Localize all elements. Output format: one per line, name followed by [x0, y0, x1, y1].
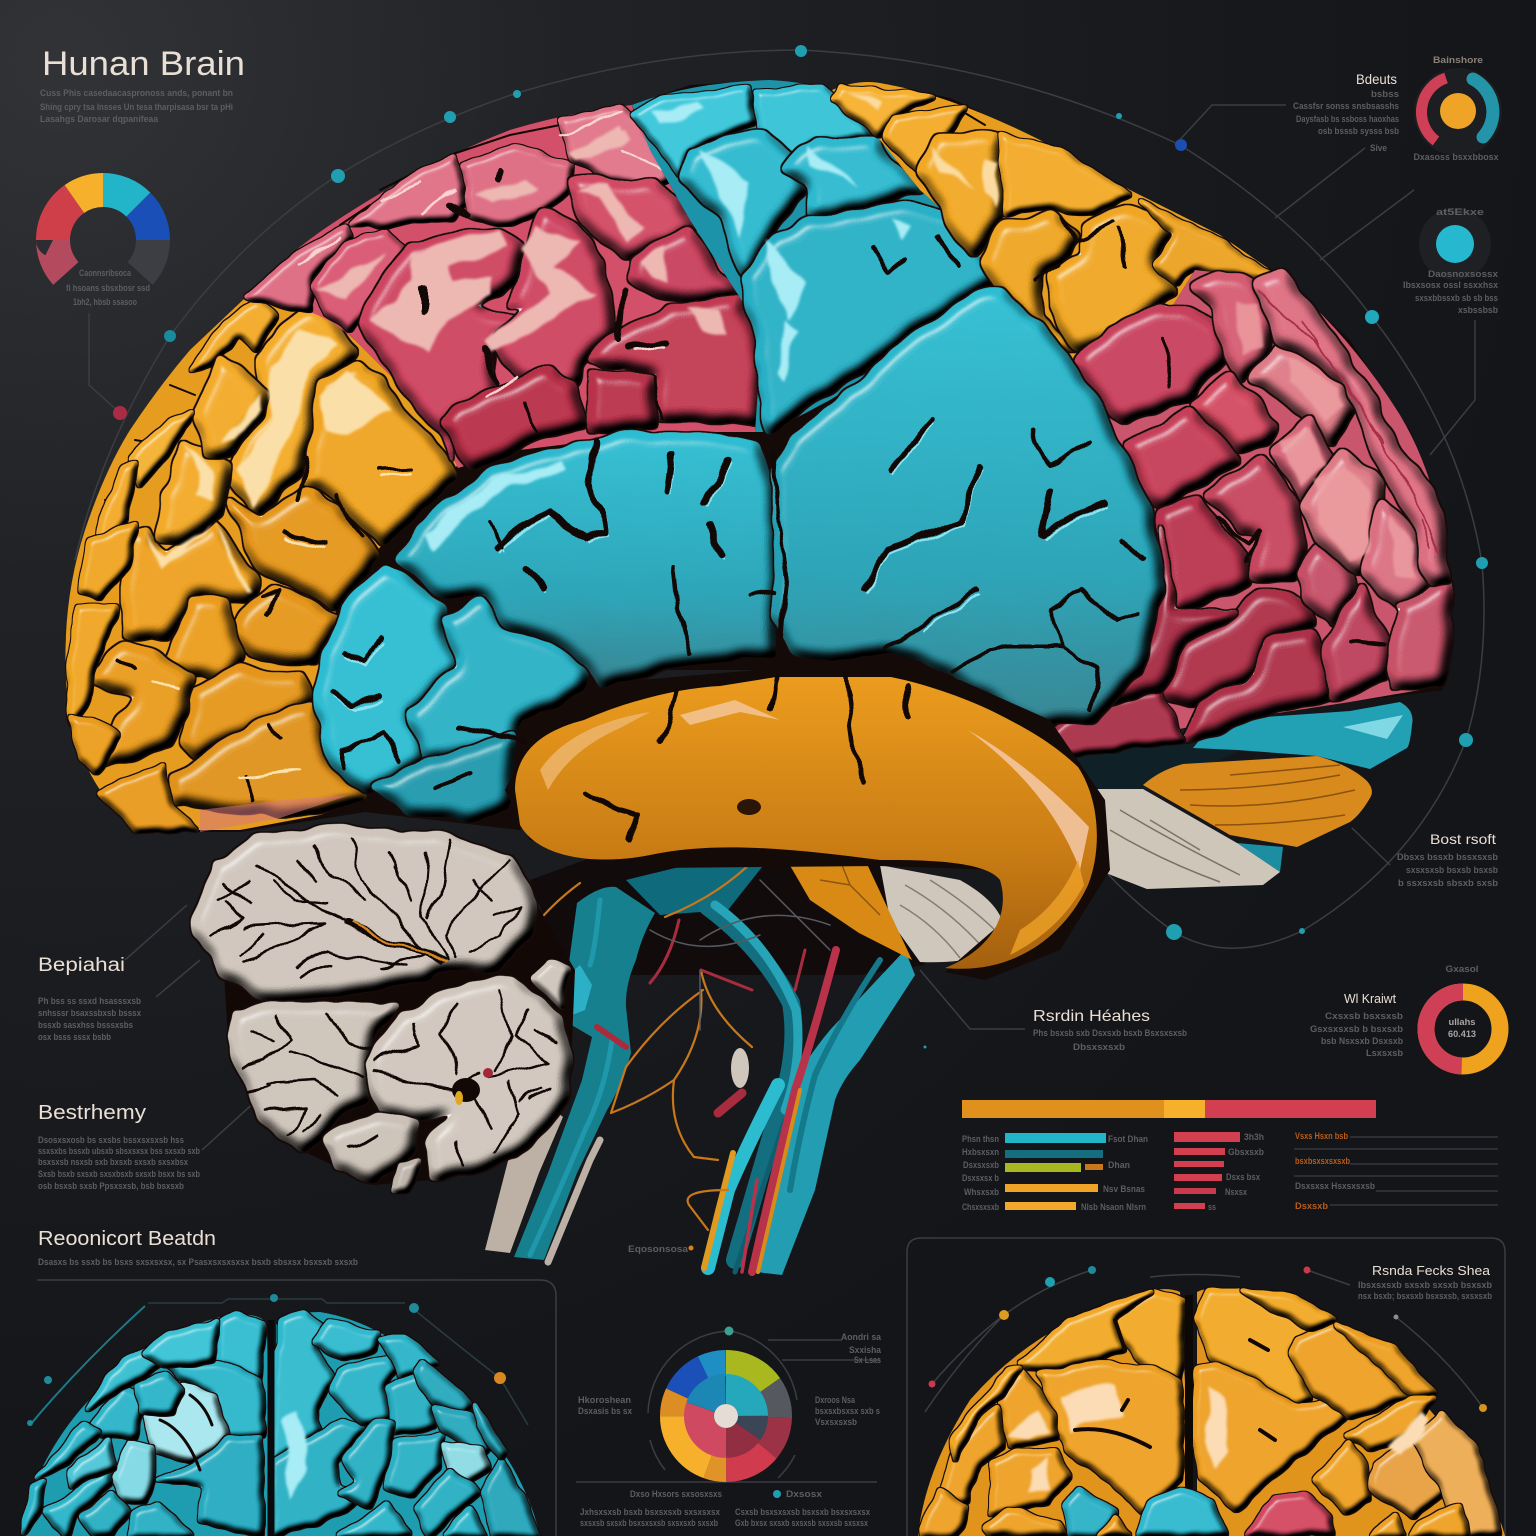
intro text: Shing cpry tsa Insses Un tesa tharpisasa bsr ta pHi [40, 102, 233, 112]
bar chart: middle: ss [1208, 1202, 1216, 1212]
grey fin [880, 865, 1005, 962]
pie chart block [576, 1326, 882, 1528]
left labels: brainstem text: Sxsb bsxb sxsxb sxsxbsxb sxsxb bsxx bs sxb [38, 1169, 200, 1179]
pie labels: Dxroos Nsa [815, 1395, 856, 1405]
brainstem and nerves [485, 840, 925, 1275]
intro text: Cuss Phis casedaacaspronoss ands, ponant bn [40, 88, 233, 98]
annotation arcs and leader lines [75, 50, 1484, 1150]
right mid label: Bost rsoft [1430, 831, 1496, 847]
list with rules: Dsxsxb [1295, 1201, 1329, 1211]
right mid label: Dbsxs bssxb bssxsxsb [1397, 852, 1499, 862]
circle stat: upper right: at5Ekxe [1436, 207, 1484, 217]
ring chart: top right [1414, 55, 1502, 162]
left labels: cerebellum text: bssxb sasxhss bsssxsbs [38, 1020, 133, 1030]
yellow brain caption [1358, 1263, 1492, 1301]
donut chart and label: Wl Kraiwt [1344, 991, 1396, 1006]
bar chart: left: Phsn thsn [962, 1134, 999, 1144]
teal brain [21, 1312, 540, 1536]
bar chart: left: Whsxsxb [964, 1187, 999, 1197]
top right labels: bsbss [1371, 89, 1399, 99]
cerebrum dark base [65, 80, 1450, 832]
list with rules: Vsxs Hsxn bsb [1295, 1131, 1348, 1141]
donut chart and label: Lsxsxsb [1366, 1048, 1404, 1058]
pie labels: Jxhsxsxsb bsxb bsxsxsxb sxsxsxsx [580, 1507, 720, 1517]
donut chart and label: Gsxsxsxsb b bsxsxb [1310, 1024, 1404, 1034]
pie labels: bsxsxbsxsx sxb s [815, 1406, 880, 1416]
right heading block: Rsrdin Héahes [1033, 1008, 1150, 1025]
bar chart: left: Dhan [1108, 1160, 1130, 1170]
pie labels: Dxso Hxsors sxsosxsxs [630, 1489, 722, 1499]
left labels: brainstem text: bsxsxsb nsxsb sxb bxsxb sxsxb sxsxbsx [38, 1157, 188, 1167]
annotation dots [113, 45, 1488, 1048]
bar chart: middle: Dsxs bsx [1226, 1172, 1260, 1182]
right mid label [1397, 831, 1499, 888]
title block [40, 45, 245, 124]
yellow brain caption: Ibsxsxsxb sxsxb sxsxb bsxsxb [1358, 1280, 1492, 1290]
gauge caption: fi hsoans sbsxbosr ssd [66, 283, 150, 293]
right heading block: Phs bsxsb sxb Dsxsxb bsxb Bsxsxsxsb [1033, 1028, 1187, 1038]
parietal lobe: pink gyri [245, 105, 761, 468]
left labels: cerebellum text: Bepiahai [38, 955, 125, 976]
panel: yellow brain bottom right [907, 1238, 1505, 1536]
pie labels [578, 1332, 882, 1528]
intro text: Lasahgs Darosar dqpanifeaa [40, 114, 159, 124]
bar chart: left: Nlsb Nsaon Nlsrn [1081, 1202, 1146, 1212]
heading: lower left: Dsasxs bs ssxb bs bsxs sxsxsxsx, sx Psasxsxsxsxsx bsxb sbsxsx bsxsxb sxsxb [38, 1257, 358, 1267]
heading: lower left: Reoonicort Beatdn [38, 1228, 216, 1250]
circle stat: upper right: Daosnoxsossx [1428, 269, 1498, 279]
frontal lobe: yellow gyri [65, 298, 458, 832]
panel: teal brain bottom left [21, 1280, 556, 1536]
donut [1426, 992, 1500, 1066]
pie chart [673, 1363, 779, 1469]
intro text [40, 88, 233, 124]
pie labels: Hkoroshean [578, 1395, 631, 1405]
occipital lobe: pink right gyri [1050, 270, 1450, 756]
pie labels: Aondri sa [841, 1332, 882, 1342]
top right labels: osb bsssb sysss bsb [1318, 126, 1399, 136]
pie labels: Csxsb bsxsxsxsb bsxsxb bsxsxsxsx [735, 1507, 870, 1517]
right mid label: sxsxsxsb bsxsb bsxsb [1406, 865, 1498, 875]
yellow brain caption: nsx bsxb; bsxsxb bsxsxsb, sxsxsxb [1358, 1291, 1492, 1301]
top right labels: Cassfsr sonss snsbsasshs [1293, 101, 1399, 111]
title: Hunan Brain [42, 45, 245, 83]
bar chart: middle: Gbsxsxb [1228, 1147, 1264, 1157]
left labels: brainstem text: ssxsxbs bssxb ubsxb sbsxsxsx bss sxsxb sxb [38, 1146, 200, 1156]
bar chart: left: Chsxsxsxb [962, 1202, 999, 1212]
circle stat: upper right [1403, 207, 1498, 315]
upper frontal lobe: yellow gyri [831, 82, 1285, 372]
top right labels [1293, 71, 1399, 153]
circle stat: upper right: sxsxbbssxb sb sb bss [1415, 293, 1498, 303]
pie labels: Sxxisha [849, 1345, 882, 1355]
yellow brain caption: Rsnda Fecks Shea [1372, 1263, 1491, 1278]
bar chart: middle: Nsxsx [1225, 1187, 1247, 1197]
gauge caption: Caonnsribsoca [79, 268, 132, 278]
left labels: cerebellum text [38, 955, 141, 1042]
bar chart: left: Dsxsxsx b [962, 1173, 999, 1183]
pie labels: Dsxasis bs sx [578, 1406, 632, 1416]
bar chart: left: Hxbsxsxn [962, 1147, 999, 1157]
left labels: brainstem text [38, 1102, 200, 1191]
top right labels: Daysfasb bs ssboss haoxhas [1296, 114, 1399, 124]
heading: lower left [38, 1228, 358, 1267]
ring chart: top right: Dxasoss bsxxbbosx [1414, 152, 1498, 162]
small stem caption: Eqosonsosa [628, 1244, 689, 1254]
orange wing [781, 847, 912, 960]
bar chart: left: Nsv Bsnas [1103, 1184, 1145, 1194]
temporal band: teal lobes [315, 290, 1160, 820]
left labels: cerebellum text: snhsssr bsaxssbxsb bsssx [38, 1008, 141, 1018]
donut chart and label: bsb Nsxsxb Dsxsxb [1321, 1036, 1403, 1046]
cerebellum [195, 828, 575, 1192]
pie labels: Vsxsxsxsb [815, 1417, 857, 1427]
temporal lobe: orange [505, 662, 1110, 980]
list with rules: bsxbsxsxsxsxb [1295, 1156, 1350, 1166]
circle stat: upper right: Ibsxsosx ossl ssxxhsx [1403, 280, 1498, 290]
circle stat: upper right: xsbssbsb [1458, 305, 1498, 315]
list with rules: Dsxsxsx Hsxsxsxsb [1295, 1181, 1375, 1191]
bar chart: left: Fsot Dhan [1108, 1134, 1148, 1144]
donut chart and label: Gxasol [1446, 964, 1478, 974]
pie labels: sxsxsb sxsxb bsxsxsxsb sxsxsxb sxsxb [580, 1518, 718, 1528]
gauge caption: 1bh2, hbsb ssasoo [73, 297, 137, 307]
left labels: brainstem text: Bestrhemy [38, 1102, 146, 1124]
donut chart and label [1310, 964, 1500, 1066]
bar chart: left: Dsxsxsxb [963, 1160, 999, 1170]
list with rules [1294, 1131, 1498, 1211]
yellow brain [918, 1288, 1505, 1536]
donut chart and label: Cxsxsb bsxsxsb [1325, 1011, 1404, 1021]
ring chart: top right: Bainshore [1433, 55, 1483, 65]
bar chart: middle: 3h3h [1244, 1132, 1264, 1142]
left labels: brainstem text: Dsosxsxosb bs sxsbs bssxsxsxsb hss [38, 1135, 184, 1145]
left labels: cerebellum text: Ph bss ss ssxd hsasssxsb [38, 996, 141, 1006]
right heading block: Dbsxsxsxb [1073, 1042, 1126, 1052]
right heading block [1033, 1008, 1187, 1052]
stacked bar [962, 1100, 1376, 1118]
donut chart and label: ullahs [1448, 1017, 1476, 1027]
gauge caption [66, 268, 150, 307]
bar chart: middle [1174, 1132, 1264, 1212]
upper central lobe: teal gyri [632, 80, 1050, 433]
top right labels: Sive [1370, 143, 1387, 153]
left labels: brainstem text: osb bsxsb sxsb Ppsxsxsb, bsb bsxsxb [38, 1181, 184, 1191]
left labels: cerebellum text: osx bsss sssx bsbb [38, 1032, 111, 1042]
semicircle gauge [53, 190, 153, 290]
top right labels: Bdeuts [1356, 71, 1397, 87]
pie labels: Dxsosx [786, 1489, 822, 1499]
bar chart: left [962, 1133, 1148, 1212]
pie labels: Gxb bxsx sxsxb sxsxsb sxsxsb sxsxsx [735, 1518, 868, 1528]
pie labels: Sx Lsas [854, 1355, 881, 1365]
rear structures [1060, 702, 1412, 889]
right mid label: b ssxsxsb sbsxb sxsb [1398, 878, 1499, 888]
donut chart and label: 60.413 [1448, 1029, 1476, 1039]
main brain illustration [65, 80, 1450, 1275]
